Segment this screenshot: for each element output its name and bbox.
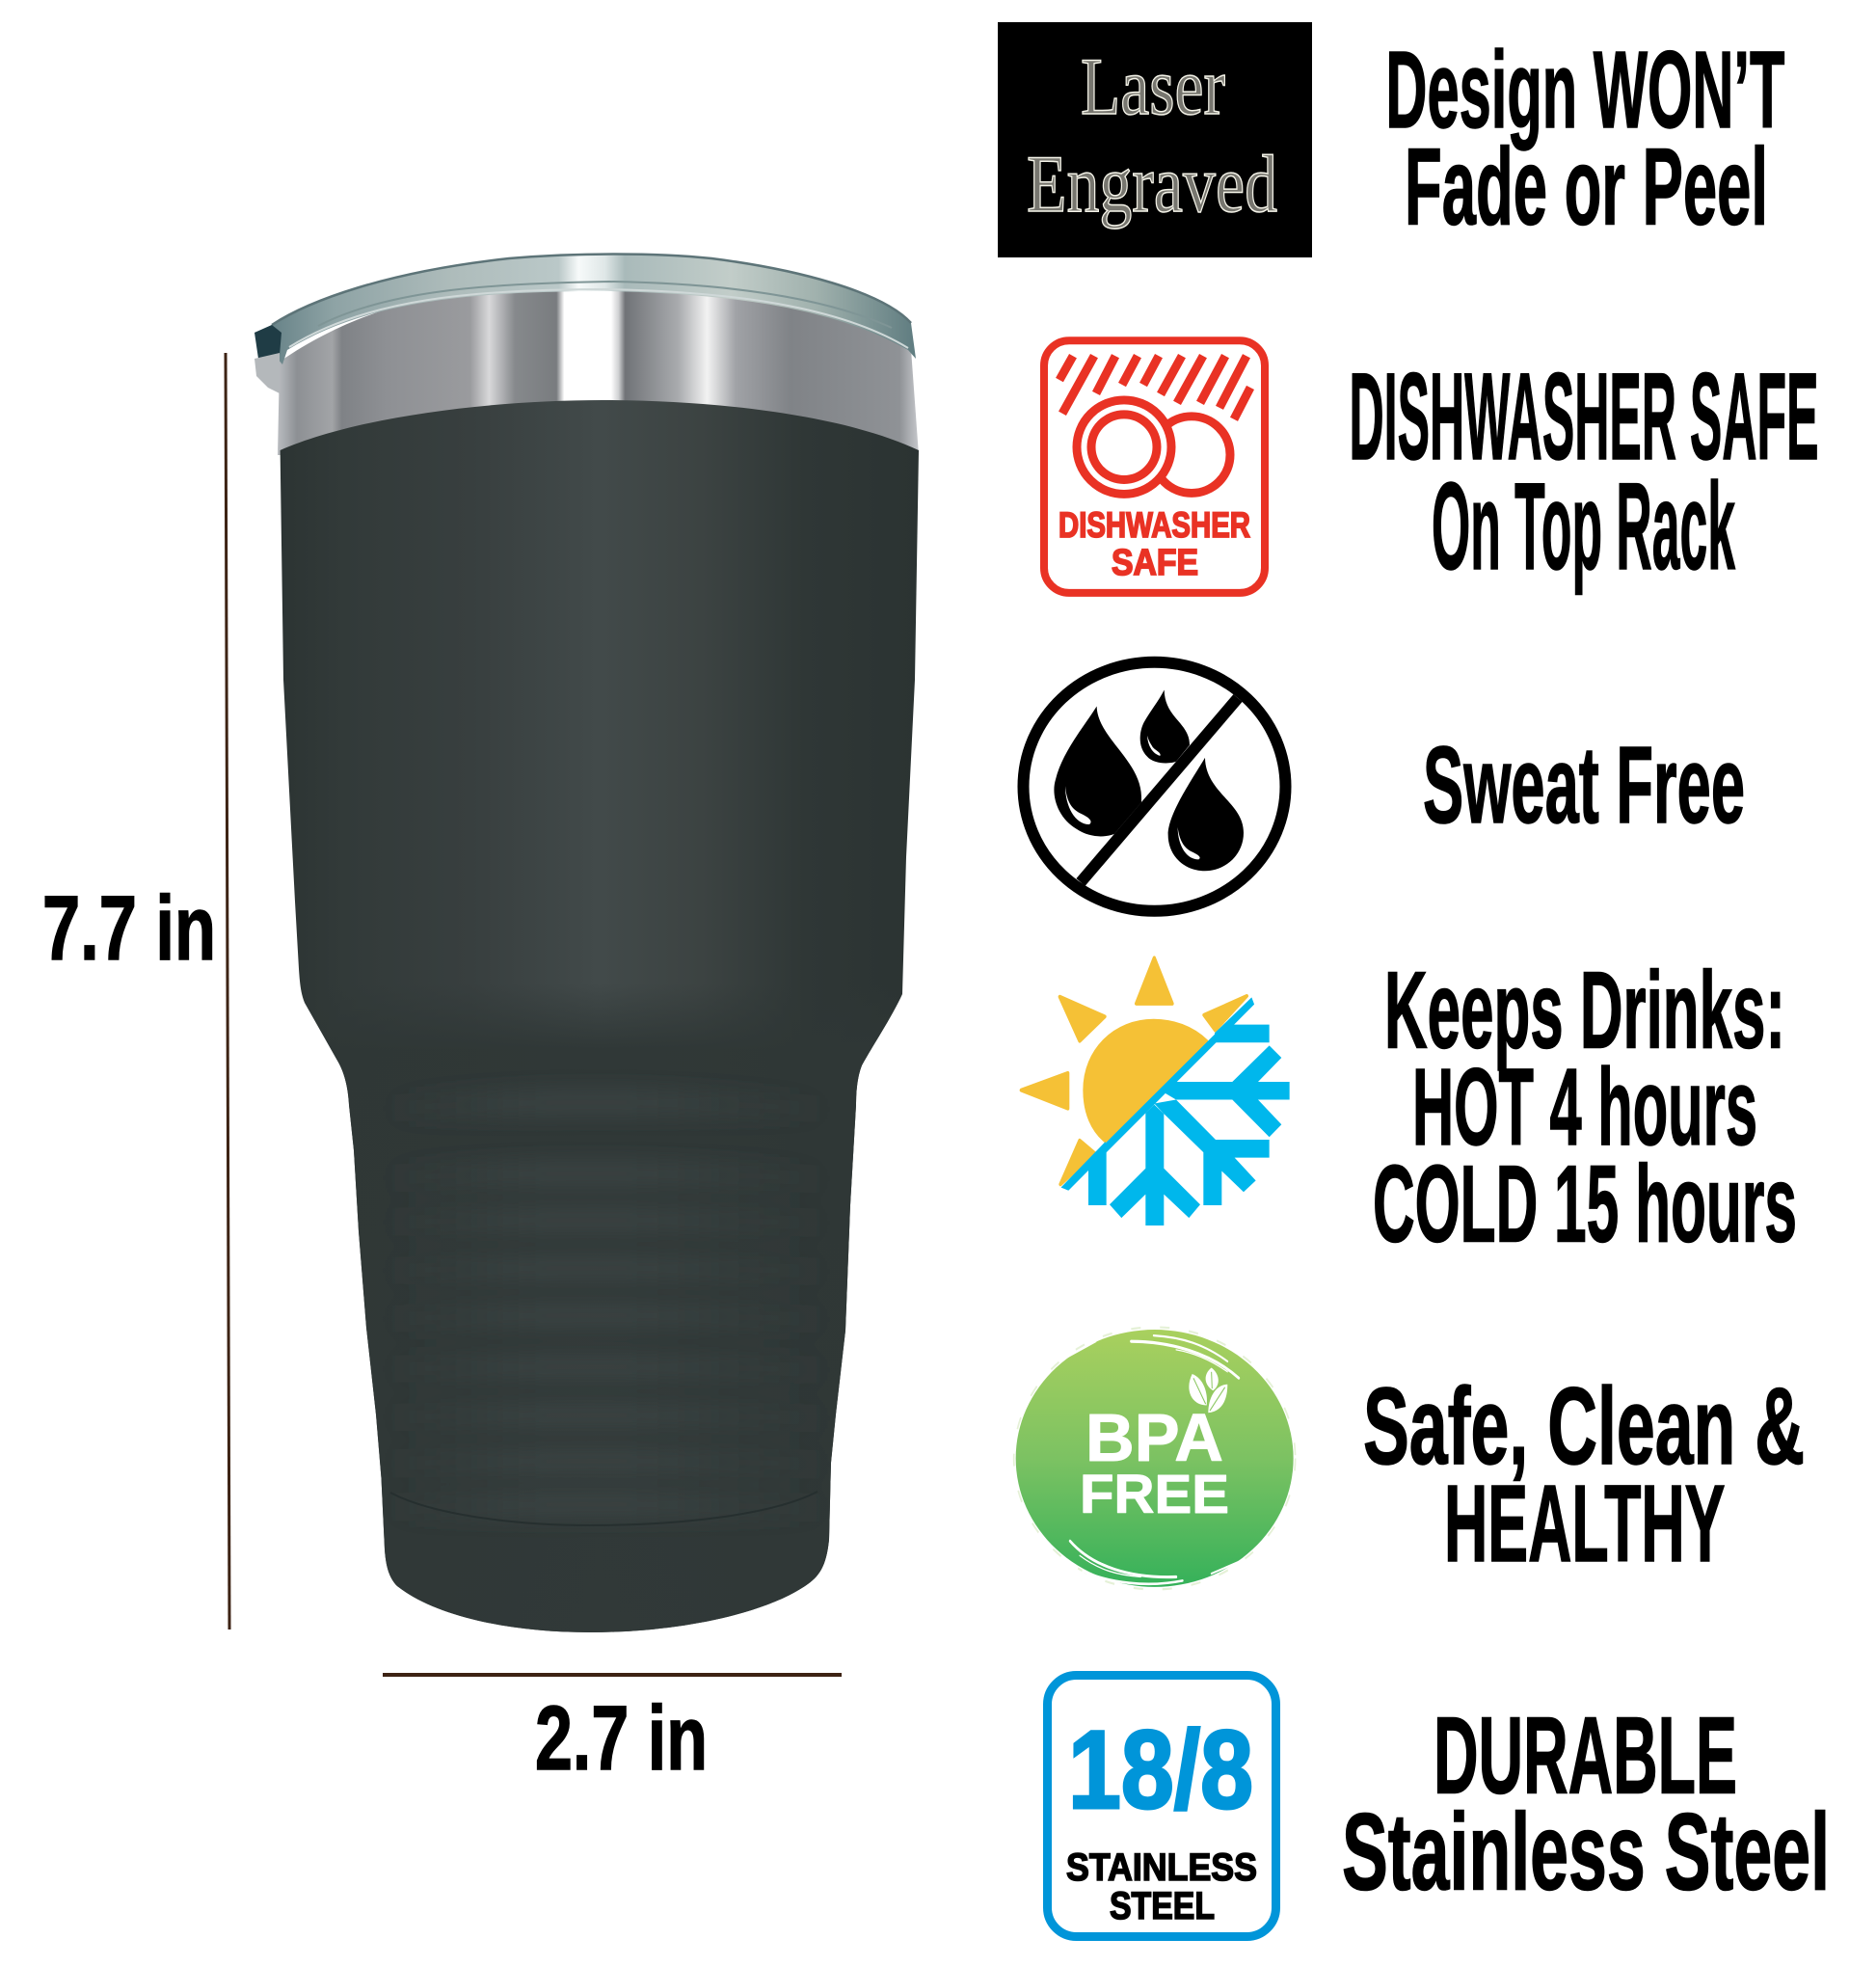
text: safe clean healthy bbox=[1363, 1365, 1805, 1584]
icon: bpa free: FREE bbox=[1080, 1464, 1229, 1525]
text: dishwasher safe on top rack bbox=[1350, 348, 1818, 596]
width label: 2.7 in bbox=[535, 1687, 708, 1790]
height dimension line bbox=[226, 353, 229, 1629]
width dimension line bbox=[383, 1673, 842, 1677]
tumbler lid bbox=[255, 255, 916, 393]
icon: laser engraved badge bbox=[998, 22, 1312, 257]
text: keeps drinks hot and cold bbox=[1373, 949, 1797, 1265]
tumbler body bbox=[270, 391, 935, 1649]
text: durable stainless steel bbox=[1342, 1695, 1830, 1913]
icon: bpa free bbox=[1014, 1327, 1296, 1589]
icon: 18/8 stainless steel: STAINLESS bbox=[1066, 1846, 1257, 1889]
icon: 18/8 stainless steel bbox=[1047, 1676, 1276, 1936]
icon: laser engraved badge: Engraved bbox=[1027, 139, 1277, 229]
icon: laser engraved badge: Laser bbox=[1081, 41, 1225, 132]
icon: sweat free bbox=[1024, 662, 1286, 911]
icon: dishwasher safe: SAFE bbox=[1112, 543, 1198, 583]
text: design won't fade bbox=[1385, 29, 1784, 247]
icon: dishwasher safe: DISHWASHER bbox=[1059, 505, 1250, 545]
tumbler illustration bbox=[255, 255, 935, 1649]
icon: 18/8 stainless steel: 18/8 bbox=[1068, 1709, 1253, 1832]
icon: 18/8 stainless steel: STEEL bbox=[1110, 1885, 1215, 1927]
icon: bpa free: BPA bbox=[1085, 1400, 1223, 1475]
height label: 7.7 in bbox=[42, 877, 216, 980]
icon: dishwasher safe bbox=[1044, 340, 1265, 593]
icon: hot and cold sun snowflake bbox=[1021, 957, 1290, 1225]
steel rim band bbox=[278, 287, 919, 455]
